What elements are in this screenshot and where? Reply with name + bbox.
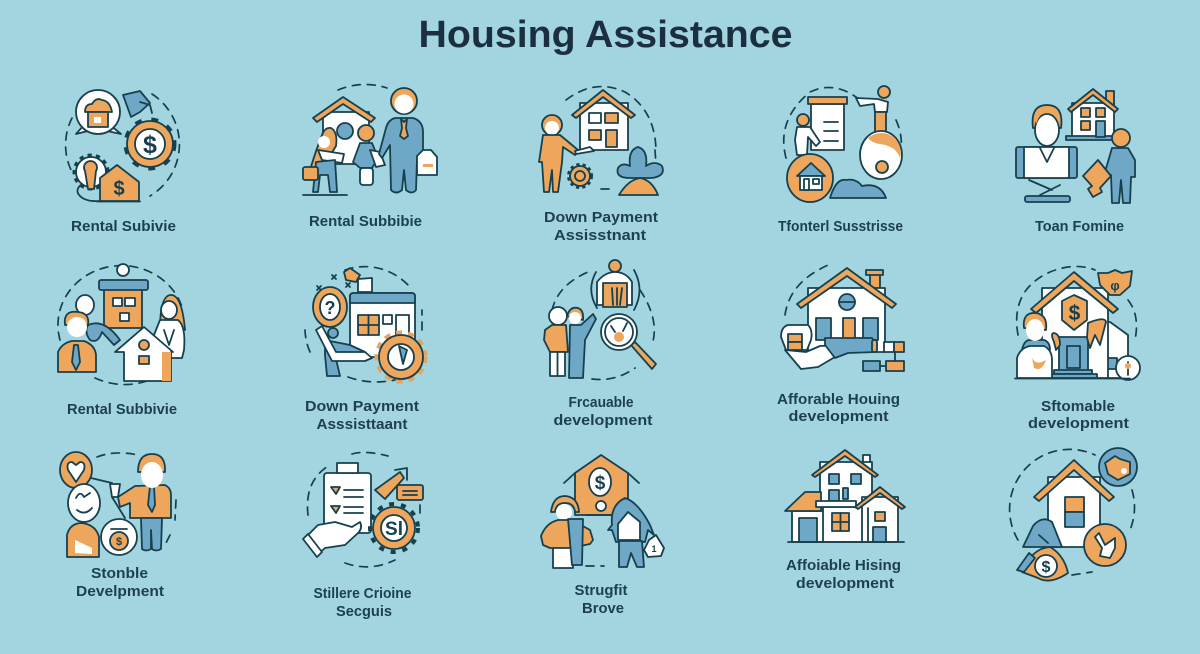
icon 7: down payment building: ? bbox=[324, 298, 336, 318]
label: Affoiable Hising development: Affoiable Hising bbox=[786, 558, 901, 574]
label: Sftomable development bbox=[1028, 399, 1129, 432]
label: Stonble Develpment bbox=[76, 566, 164, 600]
label: Strugfit Brove: Strugfit bbox=[574, 583, 628, 599]
label: Down Payment Assistant: Assisstnant bbox=[554, 228, 646, 244]
label: Stillere Crioine Secguis bbox=[314, 586, 412, 620]
label: Down Payment Assistant: Asssisttaant bbox=[316, 417, 408, 433]
label: Frcauable development: development bbox=[554, 413, 653, 429]
icon 4: tenant services bbox=[784, 86, 902, 202]
icon 14: affordable housing row bbox=[785, 450, 905, 542]
label: Down Payment Assistant bbox=[305, 399, 419, 433]
label: Afforable Houing development bbox=[777, 392, 900, 425]
icon 11: stable development people bbox=[60, 452, 176, 557]
icon 1: rental subsidy: $ bbox=[143, 131, 157, 159]
label: Afforable Houing development: Afforable Houing bbox=[777, 392, 900, 408]
label: Stillere Crioine Secguis: Secguis bbox=[336, 604, 392, 620]
icon 12: checklist in hand bbox=[303, 452, 423, 567]
label: Strugfit Brove bbox=[574, 583, 628, 617]
label: Stillere Crioine Secguis: Stillere Crioine bbox=[314, 586, 412, 602]
label: Down Payment Assistant bbox=[544, 210, 658, 244]
icon 7: down payment building bbox=[305, 267, 425, 382]
icon 13: struggling households bbox=[541, 455, 664, 568]
label: Toan Fomine: Toan Fomine bbox=[1035, 219, 1124, 235]
icon 1: rental subsidy: $ bbox=[113, 178, 125, 200]
label: Rental Subivie: Rental Subivie bbox=[71, 219, 176, 235]
label: Frcauable development bbox=[554, 395, 653, 429]
label: Rental Subbibie: Rental Subbibie bbox=[309, 214, 422, 230]
label: Affoiable Hising development: development bbox=[796, 576, 894, 592]
label: Affoiable Hising development bbox=[786, 558, 901, 592]
label: Down Payment Assistant: Down Payment bbox=[544, 210, 658, 226]
label: Frcauable development: Frcauable bbox=[568, 395, 634, 411]
label: Stonble Develpment: Develpment bbox=[76, 584, 164, 600]
icon 10: sustainable development house bbox=[1015, 266, 1140, 380]
label: Tfonterl Susstrisse: Tfonterl Susstrisse bbox=[778, 219, 903, 235]
label: Sftomable development: Sftomable bbox=[1041, 399, 1115, 415]
icon 6: community housing bbox=[58, 264, 185, 385]
label: Stonble Develpment: Stonble bbox=[91, 566, 148, 582]
icon 1: rental subsidy bbox=[66, 90, 179, 202]
icon 2: family with agent bbox=[303, 84, 437, 195]
icon 10: sustainable development house: $ bbox=[1069, 302, 1081, 325]
icon 11: stable development people: $ bbox=[116, 536, 122, 548]
icon 15: home with financial support: $ bbox=[1042, 559, 1051, 576]
label: Rental Subbivie: Rental Subbivie bbox=[67, 402, 177, 418]
icon 8: people with magnifier bbox=[544, 260, 656, 380]
label: Strugfit Brove: Brove bbox=[582, 601, 624, 617]
icon 9: affordable housing development bbox=[781, 263, 904, 371]
icon 15: home with financial support bbox=[1010, 448, 1137, 581]
icon 13: struggling households: 1 bbox=[651, 544, 657, 554]
label: Sftomable development: development bbox=[1028, 416, 1129, 432]
icon 13: struggling households: $ bbox=[595, 473, 606, 494]
icon 5: online loan advisor bbox=[1016, 89, 1135, 203]
label: Afforable Houing development: development bbox=[788, 409, 889, 425]
icon 3: down payment bbox=[539, 87, 663, 195]
title: Housing Assistance bbox=[418, 14, 792, 56]
label: Down Payment Assistant: Down Payment bbox=[305, 399, 419, 415]
icon 10: sustainable development house: φ bbox=[1110, 278, 1120, 293]
icon 12: checklist in hand: Sl bbox=[385, 519, 403, 540]
